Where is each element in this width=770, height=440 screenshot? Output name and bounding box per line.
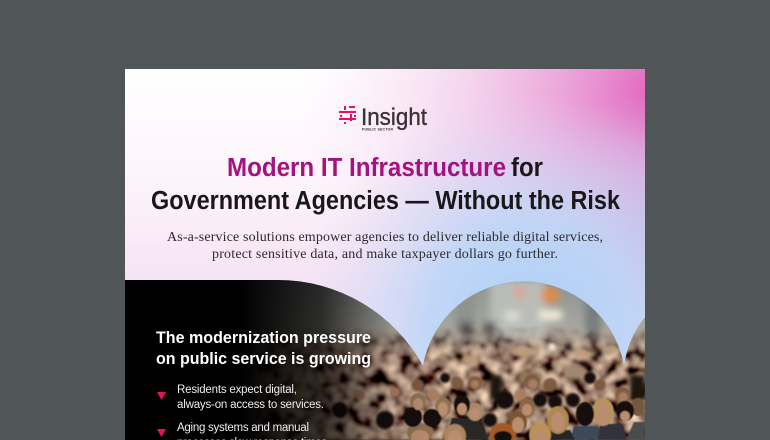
- bullet 1: Residents expect digital,: [177, 384, 297, 396]
- distant highlights: [432, 343, 645, 400]
- bullet 2: [157, 422, 327, 440]
- title: for: [511, 154, 543, 182]
- icon: triangle bullet: [157, 392, 166, 400]
- subtitle: protect sensitive data, and make taxpayer dollars go further.: [212, 247, 558, 262]
- bullet 1: [157, 384, 324, 411]
- panel heading: The modernization pressure: [156, 328, 371, 347]
- panel heading: [156, 328, 371, 368]
- title line 1: Modern IT Infrastructure: [227, 154, 506, 182]
- blurred street backdrop: [262, 280, 645, 440]
- foreground people: [404, 393, 645, 440]
- infographic canvas: [125, 69, 645, 440]
- logo subline: PUBLIC SECTOR: [362, 128, 393, 132]
- shoulders: [445, 418, 645, 440]
- faces: [411, 398, 630, 440]
- crowd texture: [256, 328, 645, 440]
- subtitle: [167, 230, 603, 262]
- crowd photo panel: [125, 280, 645, 440]
- hair: [407, 393, 645, 440]
- gradient card background: [125, 69, 645, 366]
- icon: Insight mark: [339, 106, 356, 124]
- black fade overlay: [125, 280, 418, 440]
- subtitle: As-a-service solutions empower agencies to deliver reliable digital services,: [167, 230, 603, 245]
- logo wordmark: Insight: [361, 104, 427, 131]
- mid-ground heads: [332, 372, 631, 429]
- bullet 1: always-on access to services.: [177, 399, 324, 411]
- title: [151, 154, 621, 215]
- text block: modernization pressure: [156, 328, 371, 440]
- bullet 2: Aging systems and manual: [177, 422, 309, 434]
- icon: triangle bullet: [157, 429, 166, 437]
- title line 2: Government Agencies — Without the Risk: [151, 187, 621, 215]
- logo: Insight Public Sector: [339, 104, 427, 132]
- panel heading: on public service is growing: [156, 349, 371, 368]
